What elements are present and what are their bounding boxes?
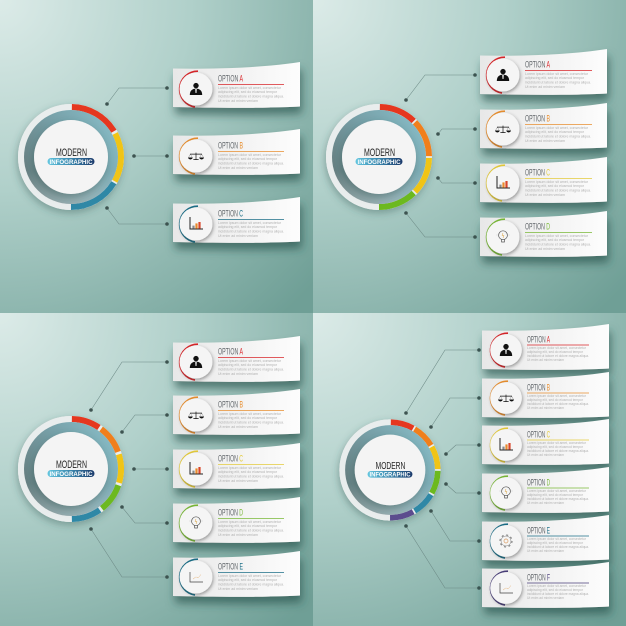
card: option D [482,467,609,513]
hub: central circle [1,399,141,539]
card: option C [173,443,300,489]
panel: six options [313,313,626,626]
card: option C: Ut enim ad minim veniam [527,453,564,457]
connector lines [404,348,481,590]
card: option B: adipiscing elit, sed do eiusmod tempor [218,416,278,420]
card: option E: OPTION E [218,562,243,572]
card: option A: OPTION A [218,74,243,84]
card: option A: Lorem ipsum dolor sit amet, consectetur [527,346,587,350]
card: option C [173,197,300,243]
card: option C: Lorem ipsum dolor sit amet, consectetur [218,221,282,225]
card: option D: Lorem ipsum dolor sit amet, consectetur [525,234,589,238]
card: option C: OPTION C [218,454,243,464]
card: option C: OPTION C [218,209,243,219]
card: option F: OPTION F [527,573,550,583]
card: option A: Lorem ipsum dolor sit amet, consectetur [525,72,589,76]
card: option B: adipiscing elit, sed do eiusmod tempor [527,398,584,402]
hub: central circle: INFOGRAPHIC [50,471,93,478]
hub: central circle: MODERN [376,460,405,472]
card: option F: adipiscing elit, sed do eiusmod tempor [527,588,584,592]
card: option E: incididunt ut labore et dolore magna aliqua. [527,545,589,549]
card: option E: incididunt ut labore et dolore magna aliqua. [218,582,284,586]
card: option D: OPTION D [218,508,243,518]
card: option C: Lorem ipsum dolor sit amet, consectetur [525,180,589,184]
card: option A: Ut enim ad minim veniam [527,358,564,362]
card: option B: Ut enim ad minim veniam [218,425,258,429]
card: option B: OPTION B [218,141,243,151]
panel: five options [0,313,313,626]
card: option A: OPTION A [527,335,550,345]
hub: central circle [324,404,456,536]
card: option D: Ut enim ad minim veniam [218,533,258,537]
card: option C: incididunt ut labore et dolore magna aliqua. [218,230,284,234]
hub: central circle: MODERN [56,147,87,159]
card: option A [173,62,300,108]
card: option F: Lorem ipsum dolor sit amet, consectetur [527,584,587,588]
card: option E: Ut enim ad minim veniam [218,587,258,591]
card: option D: adipiscing elit, sed do eiusmod tempor [218,524,278,528]
card: option B [482,372,609,418]
card: option B: Lorem ipsum dolor sit amet, consectetur [218,412,282,416]
card: option F: Ut enim ad minim veniam [527,596,564,600]
card: option A: adipiscing elit, sed do eiusmod tempor [218,90,278,94]
card: option F [482,562,609,608]
card: option B: incididunt ut labore et dolore magna aliqua. [218,420,284,424]
card: option D: adipiscing elit, sed do eiusmod tempor [527,493,584,497]
card: option C: adipiscing elit, sed do eiusmod tempor [525,184,585,188]
card: option E: Lorem ipsum dolor sit amet, consectetur [527,537,587,541]
card: option D: Ut enim ad minim veniam [527,501,564,505]
card: option A: incididunt ut labore et dolore magna aliqua. [525,80,591,84]
card: option A [482,324,609,370]
card: option D [480,211,607,257]
card: option C: incididunt ut labore et dolore magna aliqua. [527,449,589,453]
card: option B: incididunt ut labore et dolore magna aliqua. [218,162,284,166]
card: option B: Ut enim ad minim veniam [527,406,564,410]
card: option C: Ut enim ad minim veniam [218,479,258,483]
card: option A: adipiscing elit, sed do eiusmod tempor [218,363,278,367]
card: option D: OPTION D [525,222,550,232]
panel: four options [308,0,626,313]
card: option B: adipiscing elit, sed do eiusmod tempor [525,130,585,134]
card: option B: Lorem ipsum dolor sit amet, consectetur [527,394,587,398]
card: option A: Ut enim ad minim veniam [218,99,258,103]
card: option D: Lorem ipsum dolor sit amet, consectetur [218,520,282,524]
card: option D: incididunt ut labore et dolore magna aliqua. [527,497,589,501]
card: option E: OPTION E [527,526,550,536]
card: option B: adipiscing elit, sed do eiusmod tempor [218,157,278,161]
card: option C: adipiscing elit, sed do eiusmod tempor [218,470,278,474]
card: option B: incididunt ut labore et dolore magna aliqua. [527,402,589,406]
card: option A: Lorem ipsum dolor sit amet, consectetur [218,359,282,363]
card: option B [173,129,300,175]
panel: three options [0,0,313,313]
card: option D: adipiscing elit, sed do eiusmod tempor [525,238,585,242]
card: option A [480,49,607,95]
card: option D [173,497,300,543]
card: option A [173,336,300,382]
card: option C: adipiscing elit, sed do eiusmod tempor [218,225,278,229]
card: option B: Ut enim ad minim veniam [525,139,565,143]
card: option C: Ut enim ad minim veniam [525,193,565,197]
card: option A: OPTION A [525,60,550,70]
card: option A: incididunt ut labore et dolore magna aliqua. [527,354,589,358]
card: option D: incididunt ut labore et dolore magna aliqua. [525,242,591,246]
card: option A: incididunt ut labore et dolore magna aliqua. [218,94,284,98]
card: option E: adipiscing elit, sed do eiusmod tempor [218,578,278,582]
hub: central circle: MODERN [56,459,87,471]
card: option C [482,419,609,465]
card: option C: incididunt ut labore et dolore magna aliqua. [525,188,591,192]
hub: central circle: INFOGRAPHIC [50,159,93,166]
card: option C: Lorem ipsum dolor sit amet, consectetur [218,466,282,470]
card: option E [482,515,609,561]
card: option E: adipiscing elit, sed do eiusmod tempor [527,541,584,545]
card: option A: Ut enim ad minim veniam [218,372,258,376]
hub: central circle: INFOGRAPHIC [369,472,411,479]
card: option B: OPTION B [527,383,550,393]
card: option B: OPTION B [525,114,550,124]
card: option A: adipiscing elit, sed do eiusmod tempor [525,76,585,80]
card: option C: incididunt ut labore et dolore magna aliqua. [218,474,284,478]
card: option E: Lorem ipsum dolor sit amet, consectetur [218,574,282,578]
hub: central circle: MODERN [364,147,395,159]
card: option C: OPTION C [527,430,550,440]
card: option A: OPTION A [218,347,243,357]
card: option D: incididunt ut labore et dolore magna aliqua. [218,528,284,532]
card: option A: Ut enim ad minim veniam [525,85,565,89]
card: option B: Ut enim ad minim veniam [218,166,258,170]
card: option B: incididunt ut labore et dolore magna aliqua. [525,134,591,138]
card: option A: Lorem ipsum dolor sit amet, consectetur [218,86,282,90]
card: option C: OPTION C [525,168,550,178]
connector lines [404,73,477,239]
connector lines [89,360,169,579]
card: option B: Lorem ipsum dolor sit amet, consectetur [525,126,589,130]
card: option C: adipiscing elit, sed do eiusmod tempor [527,445,584,449]
hub: central circle: INFOGRAPHIC [358,159,401,166]
card: option A: adipiscing elit, sed do eiusmod tempor [527,350,584,354]
card: option C: Lorem ipsum dolor sit amet, consectetur [527,441,587,445]
card: option B: Lorem ipsum dolor sit amet, consectetur [218,153,282,157]
hub: central circle [2,88,140,226]
card: option B [173,389,300,435]
card: option B [480,103,607,149]
connector lines [105,86,169,226]
card: option D: Lorem ipsum dolor sit amet, consectetur [527,489,587,493]
card: option B: OPTION B [218,400,243,410]
card: option F: incididunt ut labore et dolore magna aliqua. [527,592,589,596]
card: option A: incididunt ut labore et dolore magna aliqua. [218,368,284,372]
card: option E [173,551,300,597]
card: option D: OPTION D [527,478,550,488]
card: option C: Ut enim ad minim veniam [218,234,258,238]
card: option D: Ut enim ad minim veniam [525,247,565,251]
card: option E: Ut enim ad minim veniam [527,549,564,553]
card: option C [480,157,607,203]
hub: central circle [308,86,450,228]
